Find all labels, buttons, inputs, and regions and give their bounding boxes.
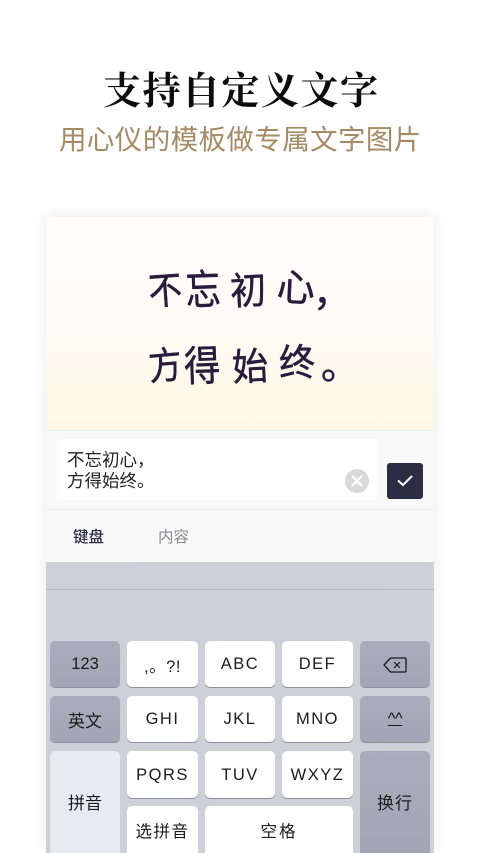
handwritten text line 2: 始 — [231, 335, 269, 392]
key: punctuation — [127, 641, 198, 687]
key: pinyin — [50, 751, 120, 853]
input text: 不忘初心， — [67, 450, 154, 470]
panel: handwriting preview — [46, 217, 434, 431]
key: 123 — [50, 641, 120, 687]
title: 支持自定义文字 — [103, 71, 380, 113]
key: backspace — [360, 641, 430, 687]
key: emoticon — [360, 696, 430, 742]
key: 123: 123 — [71, 655, 99, 673]
key: WXYZ — [282, 751, 353, 798]
confirm button — [387, 463, 423, 499]
handwritten text line 1: ， — [313, 262, 351, 317]
key: select pinyin — [127, 806, 198, 853]
key: DEF — [282, 641, 353, 687]
key: MNO: MNO — [296, 710, 339, 728]
handwritten text line 2: 。 — [321, 335, 359, 390]
handwritten text line 1: 忘 — [184, 256, 222, 317]
key: punctuation: ,。?! — [144, 658, 181, 676]
panel: keyboard — [46, 562, 434, 853]
key: MNO — [282, 696, 353, 742]
handwritten text line 2: 终 — [278, 331, 316, 388]
key: space — [205, 806, 353, 853]
tab: content: 内容 — [158, 529, 189, 546]
handwritten text line 2: 得 — [183, 332, 221, 393]
handwritten text line 1 — [146, 256, 351, 317]
divider line — [46, 509, 434, 510]
key: English — [50, 696, 120, 742]
key: emoticon: ^^ — [388, 710, 402, 728]
tab: keyboard: 键盘 — [73, 529, 104, 546]
key: return: 换行 — [377, 794, 413, 812]
key: PQRS: PQRS — [136, 766, 189, 784]
key: ABC: ABC — [221, 655, 259, 673]
handwritten text line 2: 方 — [146, 334, 184, 391]
input text: 方得始终。 — [67, 471, 154, 491]
key: ABC — [205, 641, 275, 687]
key: English: 英文 — [68, 712, 102, 731]
key: pinyin: 拼音 — [68, 794, 102, 812]
key: WXYZ: WXYZ — [291, 766, 344, 784]
key: PQRS — [127, 751, 198, 798]
icon: clear button — [345, 469, 369, 493]
handwritten text line 1: 不 — [146, 259, 184, 316]
panel: app screen card — [46, 217, 434, 853]
handwritten text line 2 — [146, 331, 359, 393]
key: TUV: TUV — [221, 766, 259, 784]
input text — [67, 450, 154, 491]
key: JKL: JKL — [224, 710, 256, 728]
handwritten text line 1: 初 — [229, 259, 267, 316]
key: TUV — [205, 751, 275, 798]
key: GHI — [127, 696, 198, 742]
key: select pinyin: 选拼音 — [136, 823, 190, 841]
handwritten text line 1: 心 — [276, 256, 316, 313]
keyboard top divider — [46, 589, 434, 590]
key: space: 空格 — [260, 823, 298, 841]
subtitle: 用心仪的模板做专属文字图片 — [59, 124, 422, 155]
key: JKL — [205, 696, 275, 742]
text input — [57, 439, 377, 500]
key: return — [360, 751, 430, 853]
key: GHI: GHI — [146, 710, 179, 728]
key: DEF: DEF — [299, 655, 336, 673]
